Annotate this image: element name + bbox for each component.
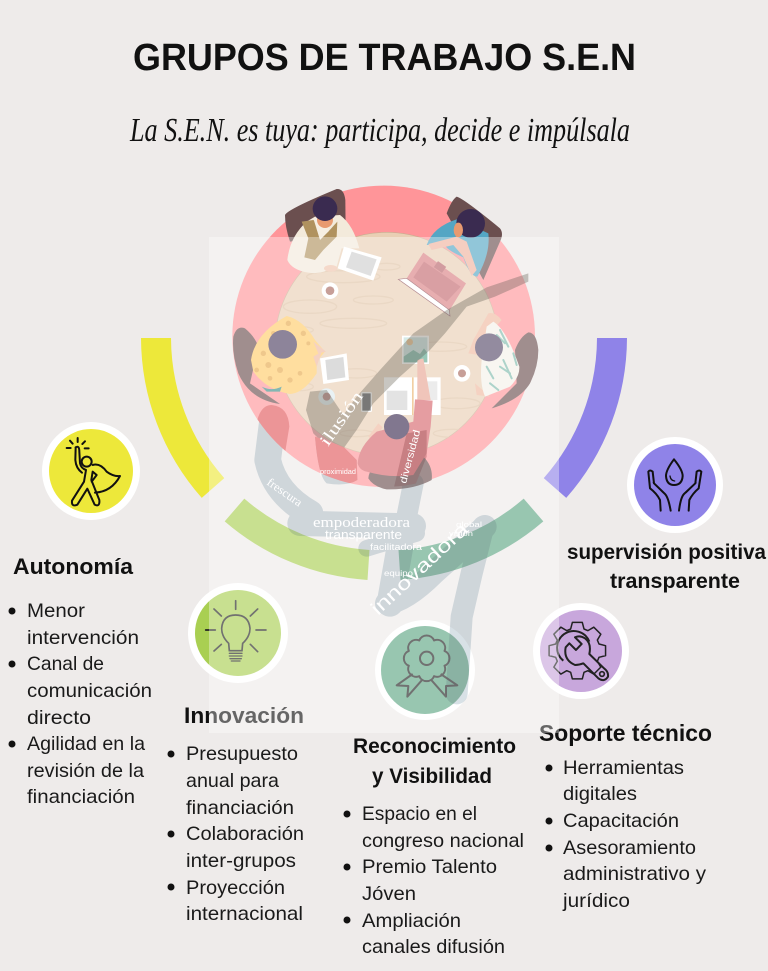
bullet list — [546, 757, 706, 912]
panel: innovación — [168, 703, 304, 925]
heading: supervisión positiva transparente — [567, 540, 767, 593]
badge: soporte técnico gear and wrench icon — [533, 603, 629, 699]
bullet list: Capacitación — [563, 810, 679, 832]
bullet list: revisión de la — [27, 760, 144, 782]
watermark words: diversidad — [398, 429, 423, 485]
sheet of paper — [338, 247, 382, 281]
person: top right — [427, 209, 489, 277]
bullet list: Proyección — [186, 877, 285, 899]
bullet list: Canal de — [27, 653, 104, 675]
arc: dark green — [400, 510, 534, 565]
wooden table — [275, 232, 498, 456]
bullet list: digitales — [563, 783, 637, 805]
bullet list: Agilidad en la — [27, 733, 145, 755]
arc: purple — [555, 338, 612, 488]
bullet list: Colaboración — [186, 823, 304, 845]
bullet list: financiación — [27, 786, 135, 808]
watermark words: equipo — [384, 569, 414, 578]
badge: supervisión hands and water drop icon — [627, 437, 723, 533]
watermark words: facilitadora — [370, 542, 422, 552]
translucent white overlay panel — [209, 237, 559, 733]
heading: y Visibilidad — [372, 765, 492, 788]
watermark words: ilusión — [316, 387, 367, 449]
bullet list: financiación — [186, 797, 294, 819]
bullet list: anual para — [186, 770, 279, 792]
bullet list — [8, 600, 152, 808]
badge: autonomía superhero icon — [42, 422, 140, 520]
panel: autonomía — [8, 554, 152, 808]
bullet list — [168, 743, 304, 925]
coffee cup — [322, 282, 338, 299]
laptop — [398, 253, 466, 316]
document — [320, 353, 349, 384]
heading: Autonomía — [13, 554, 133, 579]
watermark words: innovadora — [367, 519, 473, 620]
red circle backdrop — [232, 186, 535, 487]
picture card — [402, 336, 429, 364]
watermark words: visión — [449, 531, 473, 538]
badge: innovación light bulb icon — [188, 583, 288, 683]
heading: supervisión positiva transparente: transparente — [610, 569, 740, 593]
heading: Soporte técnico — [539, 720, 712, 746]
arc: light green — [234, 510, 368, 565]
bullet list: Espacio en el — [362, 803, 477, 825]
watermark words: proximidad — [320, 469, 356, 476]
panel: reconocimiento y visibilidad — [344, 735, 524, 958]
bullet list: Herramientas — [563, 757, 684, 779]
heading — [353, 735, 516, 788]
panel: soporte técnico — [539, 720, 712, 912]
badge: reconocimiento rosette icon — [375, 620, 475, 720]
bullet list: administrativo y — [563, 863, 706, 885]
watermark words: frescura — [264, 475, 306, 510]
person: bottom, pink shirt — [358, 358, 433, 476]
illustration: meeting table seen from above — [232, 186, 538, 489]
bullet list — [344, 803, 524, 958]
watermark words: global — [456, 522, 483, 529]
bullet list: Menor — [27, 600, 86, 622]
subtitle: La S.E.N. es tuya: participa, decide e impúlsala — [129, 112, 630, 149]
bullet list: Presupuesto — [186, 743, 298, 765]
bullet list: inter-grupos — [186, 850, 296, 872]
bullet list: Premio Talento — [362, 856, 497, 878]
watermark words — [264, 387, 483, 620]
chairs — [233, 189, 538, 489]
arc: yellow — [156, 338, 213, 488]
heading: Reconocimiento — [353, 735, 516, 758]
bullet list: comunicación — [27, 680, 152, 702]
watermark words: empoderadora — [313, 515, 410, 531]
phone — [362, 393, 371, 411]
coffee cup — [318, 388, 335, 405]
bullet list: directo — [27, 707, 91, 729]
bullet list: Jóven — [362, 883, 416, 905]
watermark: check mark word-cloud logo — [255, 273, 528, 693]
bullet list: canales difusión — [362, 936, 505, 958]
person: left, yellow shirt — [251, 316, 326, 394]
bullet list: internacional — [186, 903, 303, 925]
bullet list: jurídico — [562, 890, 630, 912]
title: GRUPOS DE TRABAJO S.E.N — [133, 37, 636, 79]
bullet list: intervención — [27, 627, 139, 649]
person: right, leaf shirt — [468, 313, 519, 397]
coffee cup — [454, 365, 470, 382]
bullet list: Asesoramiento — [563, 837, 696, 859]
open notebook — [384, 377, 441, 415]
bullet list: Ampliación — [362, 910, 461, 932]
watermark words: transparente — [325, 527, 402, 542]
person: top left — [287, 196, 359, 273]
heading: Innovación — [184, 703, 304, 728]
bullet list: congreso nacional — [362, 830, 524, 852]
